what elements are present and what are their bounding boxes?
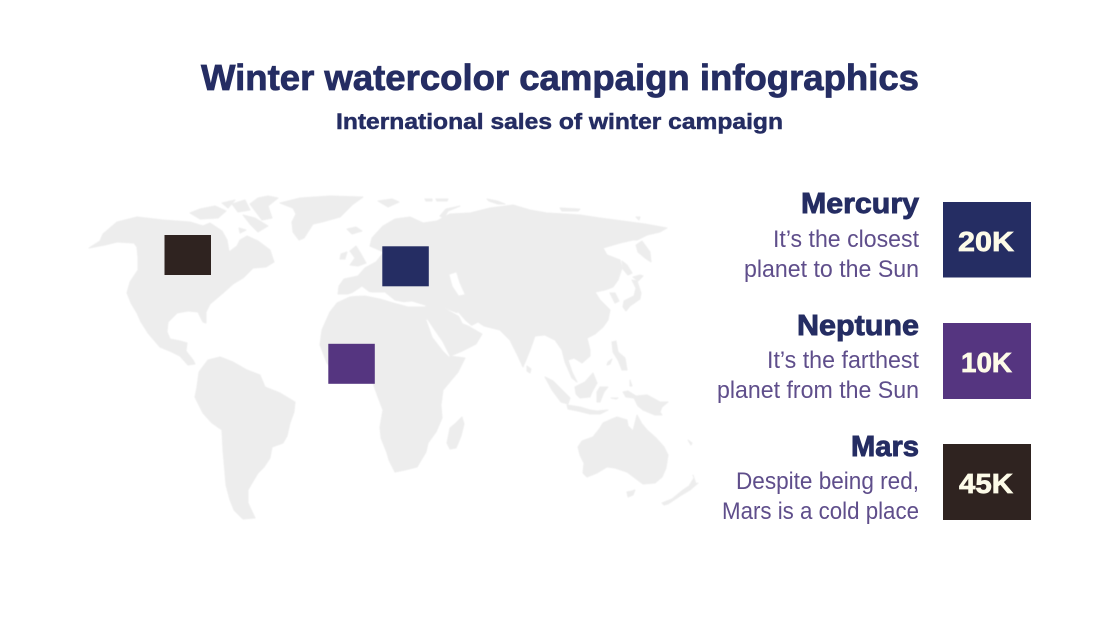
description: Mars: Despite being red,	[736, 468, 919, 495]
description: Neptune	[717, 347, 919, 404]
map: Greenland	[280, 196, 363, 240]
subtitle: International sales of winter campaign	[336, 109, 783, 134]
map: British Isles	[340, 246, 366, 266]
map: North America	[89, 217, 274, 365]
value box: 10K	[943, 323, 1031, 399]
map: Japan and Korea	[610, 275, 643, 311]
map: Caspian, Red Sea and Mediterranean gaps	[345, 273, 471, 356]
map: New Guinea	[623, 391, 668, 415]
value box: 20K	[943, 202, 1031, 278]
heading: Mars: Mars	[851, 431, 919, 463]
description: Neptune: planet from the Sun	[717, 377, 919, 404]
map: Kamchatka and Sakhalin	[622, 241, 651, 275]
value box: 20K: 20K	[958, 226, 1014, 257]
map: Arctic islands	[190, 196, 640, 234]
item: Mars	[722, 431, 1031, 525]
heading: Mercury: Mercury	[801, 188, 919, 220]
map: Sri Lanka, Madagascar	[447, 366, 531, 449]
map: Eurasia	[338, 205, 667, 382]
description: Mars: Mars is a cold place	[722, 498, 919, 525]
map: South America	[195, 357, 295, 519]
map: Africa and Arabia	[320, 295, 482, 472]
map marker: Africa	[328, 344, 375, 384]
item: Neptune	[717, 310, 1031, 404]
value box: 45K: 45K	[959, 468, 1013, 499]
description: Mercury	[744, 226, 919, 283]
description: Mercury: It’s the closest	[773, 226, 919, 253]
description: Mars	[722, 468, 919, 525]
map marker: Europe	[382, 246, 429, 286]
world map	[89, 196, 698, 519]
value box: 10K: 10K	[961, 347, 1012, 378]
map: Tasmania and New Zealand	[627, 440, 698, 505]
heading: Neptune: Neptune	[797, 310, 919, 342]
description: Mercury: planet to the Sun	[744, 256, 919, 283]
map: South-East Asia islands	[545, 341, 632, 414]
title: Winter watercolor campaign infographics	[201, 57, 919, 98]
map: Australia	[578, 415, 668, 484]
item: Mercury	[744, 188, 1031, 283]
value box: 45K	[943, 444, 1031, 520]
map marker: North America	[164, 235, 211, 275]
description: Neptune: It’s the farthest	[767, 347, 919, 374]
